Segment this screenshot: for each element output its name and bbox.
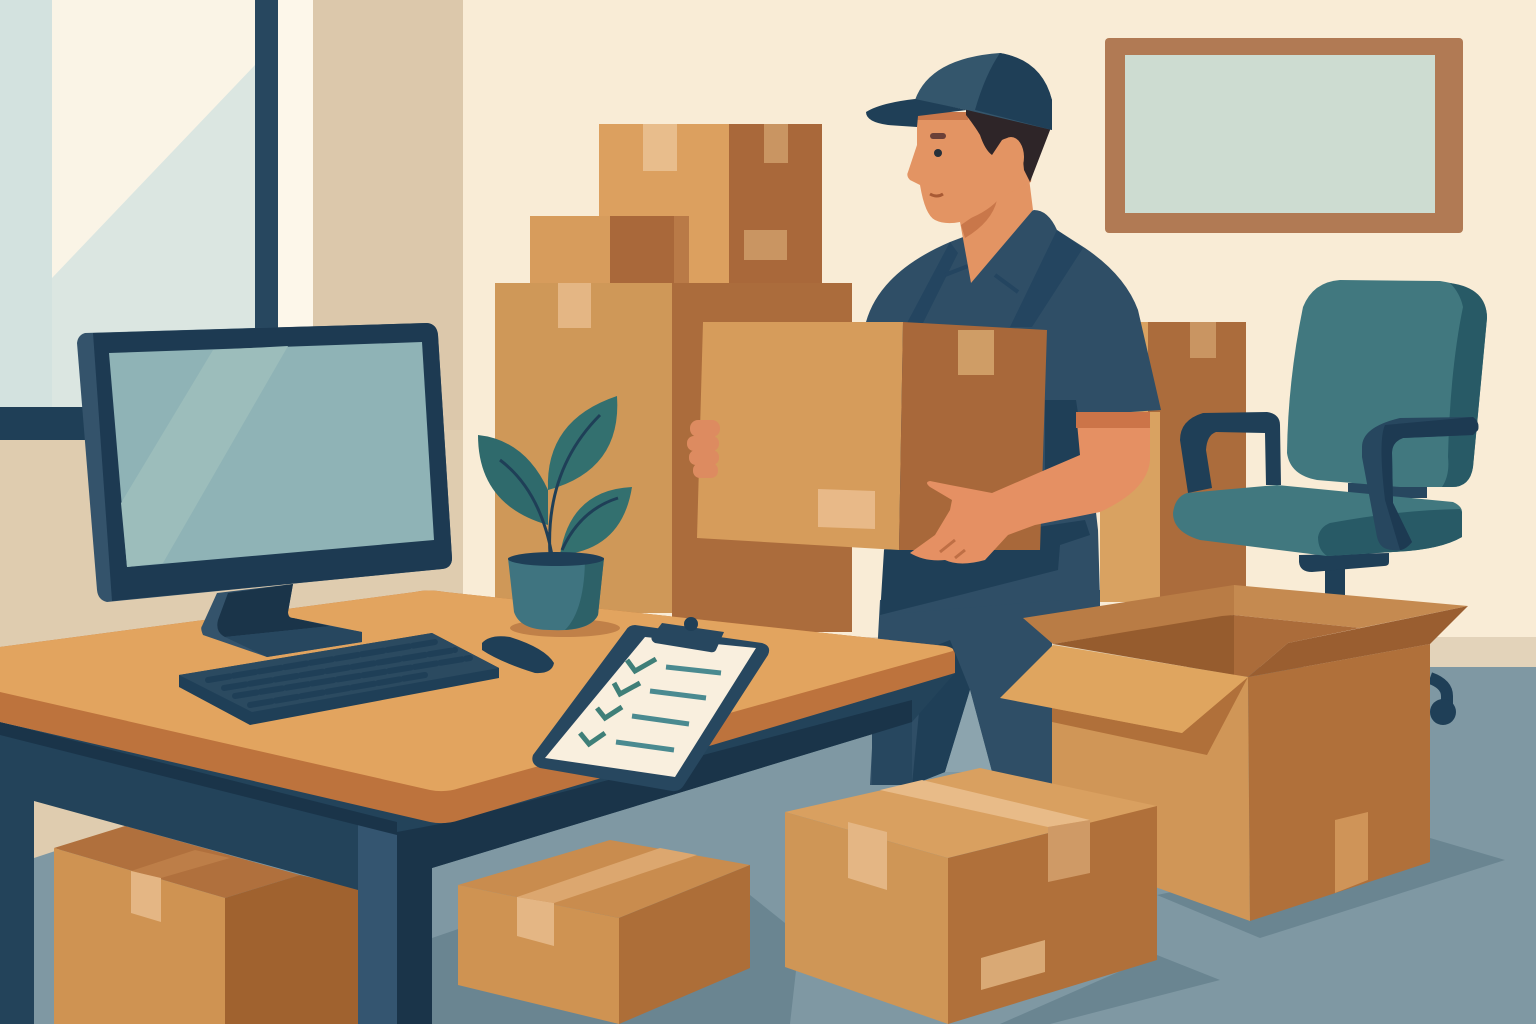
keyboard	[179, 633, 499, 725]
mover left hand	[687, 420, 720, 478]
floor box: small	[458, 840, 750, 1024]
potted plant	[478, 396, 632, 637]
desk top	[0, 590, 955, 823]
office chair	[1173, 280, 1487, 725]
box faces	[1052, 644, 1430, 921]
pot	[510, 619, 620, 637]
leaves	[478, 396, 632, 555]
mover	[866, 53, 1161, 785]
shirt	[866, 210, 1161, 615]
wall picture frame	[1105, 38, 1463, 233]
mover forearm and hand	[910, 412, 1150, 564]
head	[907, 108, 1052, 223]
monitor stand	[201, 584, 362, 657]
window	[0, 0, 313, 440]
floor box: left under desk	[54, 826, 358, 1024]
clipboard checklist	[532, 617, 769, 791]
cap	[866, 53, 1052, 130]
held box	[697, 322, 1047, 550]
floor shadows	[432, 838, 1505, 1024]
legs	[870, 590, 1100, 785]
desk frame and legs	[0, 673, 955, 1024]
neck	[960, 170, 1033, 283]
box behind mover	[1100, 322, 1246, 602]
monitor	[77, 323, 452, 657]
mouse	[482, 636, 554, 673]
back stack of boxes	[495, 124, 852, 632]
flaps	[1000, 585, 1468, 755]
desk	[0, 590, 955, 1024]
floor box: centre	[785, 768, 1157, 1024]
open box	[1000, 585, 1468, 921]
checklist items	[580, 659, 721, 750]
